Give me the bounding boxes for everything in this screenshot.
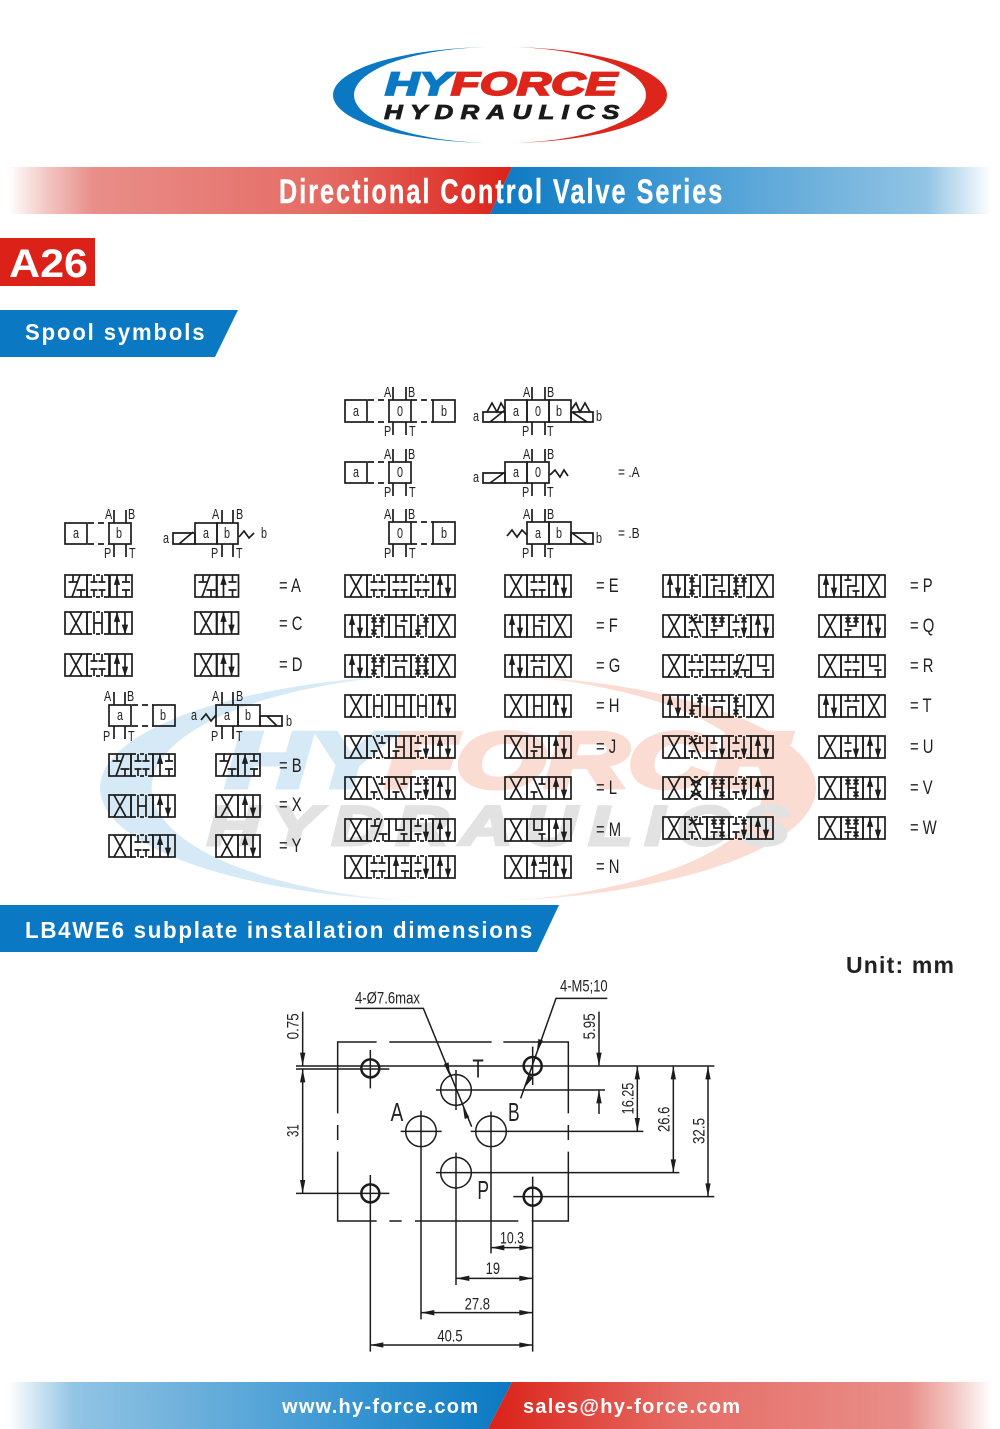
symbol: two position plain, left: a: [73, 524, 80, 541]
symbol: double solenoid three position: A: [523, 383, 530, 400]
leader 4-Ø7.6max: [355, 988, 472, 1127]
symbol: single solenoid with spring, equals .A: = .A: [618, 464, 641, 480]
unit note: Unit: mm: [846, 952, 954, 978]
symbol: two position plain, lower left: b: [160, 706, 166, 723]
symbol: two position spring and solenoid, lower left: P: [211, 727, 218, 744]
symbol: two position solenoid and spring, left: a: [163, 529, 170, 546]
symbol: single solenoid with spring, equals .A: P: [522, 483, 529, 500]
spool row M: [345, 819, 621, 841]
logo swoosh: blue: [333, 47, 497, 143]
spool row J: [345, 736, 616, 758]
spool row B: = B: [279, 755, 302, 776]
spool row D: [65, 654, 302, 676]
spool row M: = M: [596, 819, 621, 840]
symbol: two position solenoid and spring, left: P: [211, 544, 218, 561]
symbol: double position with centre, plain: a: [353, 402, 360, 419]
spool row Y: = Y: [279, 835, 301, 856]
header band: [8, 167, 992, 214]
spool row E: [345, 575, 619, 597]
watermark swoosh: red: [458, 674, 816, 902]
symbol: double position with centre, plain: B: [408, 383, 415, 400]
port letters: B: [508, 1097, 520, 1127]
symbol: double solenoid three position: T: [547, 422, 554, 439]
symbol: single solenoid with spring, equals .B: P: [522, 544, 529, 561]
symbol: single solenoid with spring, equals .B: = .B: [618, 525, 640, 541]
symbol: centre and b, plain: B: [408, 505, 415, 522]
symbol: single solenoid with spring, equals .A: B: [547, 445, 554, 462]
spool row F: = F: [596, 615, 618, 636]
symbol: two position plain, lower left: B: [127, 687, 134, 704]
symbol: double solenoid three position: [473, 383, 602, 439]
symbol: double solenoid three position: 0: [535, 402, 541, 419]
vertical dimension values: 32.5: [689, 1118, 708, 1144]
dimension lines: [303, 1012, 708, 1345]
spool row W: = W: [910, 817, 937, 838]
vertical dimension values: 16.25: [618, 1083, 637, 1114]
symbol: two position spring and solenoid, lower left: b: [286, 712, 292, 729]
spool symbols chart: [65, 383, 937, 878]
spool row X: [109, 794, 302, 817]
footer band: [8, 1382, 992, 1429]
symbol: single solenoid with spring, equals .A: a: [513, 463, 520, 480]
symbol: two position spring and solenoid, lower left: T: [236, 727, 243, 744]
symbol: centre and b, plain: 0: [397, 524, 403, 541]
symbol: two position solenoid and spring, left: T: [236, 544, 243, 561]
spool row P: = P: [910, 575, 933, 596]
watermark swoosh: blue: [100, 674, 460, 902]
spool row U: = U: [910, 736, 933, 757]
spool row L: [345, 777, 617, 799]
symbol: two position plain, lower left: P: [103, 727, 110, 744]
symbol: single solenoid with spring, equals .B: T: [547, 544, 554, 561]
symbol: centre and b, plain: T: [409, 544, 416, 561]
symbol: two position plain, left: A: [105, 505, 112, 522]
spool row D: = D: [279, 654, 302, 675]
symbol: a and centre, plain: a: [353, 463, 360, 480]
spool row E: = E: [596, 575, 619, 596]
symbol: single solenoid with spring, equals .A: [473, 445, 641, 500]
symbol: single solenoid with spring, equals .B: A: [523, 505, 530, 522]
symbol: double position with centre, plain: T: [409, 422, 416, 439]
symbol: two position plain, lower left: a: [117, 706, 124, 723]
symbol: centre and b, plain: [384, 505, 455, 561]
section banner: spool symbols: Spool symbols: [25, 320, 205, 345]
symbol: a and centre, plain: 0: [397, 463, 403, 480]
mounting holes and ports: [361, 1057, 542, 1206]
symbol: single solenoid with spring, equals .A: A: [523, 445, 530, 462]
horizontal dimension values: 40.5: [437, 1327, 463, 1346]
symbol: two position plain, left: B: [128, 505, 135, 522]
symbol: double solenoid three position: a: [513, 402, 520, 419]
footer email: sales@hy-force.com: [523, 1396, 740, 1418]
symbol: centre and b, plain: A: [384, 505, 391, 522]
symbol: two position spring and solenoid, lower left: A: [212, 687, 219, 704]
logo: [333, 47, 667, 143]
symbol: two position solenoid and spring, left: [163, 505, 267, 561]
symbol: two position solenoid and spring, left: a: [203, 524, 210, 541]
vertical dimension values: 31: [284, 1124, 303, 1137]
spool row J: = J: [596, 736, 616, 757]
symbol: double position with centre, plain: 0: [397, 402, 403, 419]
symbol: two position solenoid and spring, left: A: [212, 505, 219, 522]
symbol: single solenoid with spring, equals .B: b: [556, 524, 562, 541]
symbol: double position with centre, plain: A: [384, 383, 391, 400]
spool row F: [345, 615, 618, 637]
leader 4-Ø7.6max: 4-Ø7.6max: [355, 988, 421, 1007]
port letters: T: [472, 1053, 484, 1083]
symbol: two position spring and solenoid, lower left: a: [224, 706, 231, 723]
horizontal dimension values: 10.3: [500, 1229, 524, 1248]
symbol: two position solenoid and spring, left: B: [236, 505, 243, 522]
watermark word HYDRAULICS: HYDRAULICS: [207, 794, 789, 857]
symbol: single solenoid with spring, equals .B: [507, 505, 640, 561]
spool row Y: [109, 835, 301, 857]
symbol: a and centre, plain: T: [409, 483, 416, 500]
symbol: double solenoid three position: P: [522, 422, 529, 439]
symbol: double position with centre, plain: [345, 383, 455, 439]
section banner: subplate dimensions: [0, 905, 559, 952]
horizontal dimension values: [437, 1229, 524, 1346]
symbol: two position plain, lower left: T: [128, 727, 135, 744]
symbol: single solenoid with spring, equals .B: a: [535, 524, 542, 541]
symbol: a and centre, plain: P: [384, 483, 391, 500]
plate outline: [338, 1042, 568, 1221]
symbol: a and centre, plain: A: [384, 445, 391, 462]
symbol: two position solenoid and spring, left: b: [224, 524, 230, 541]
spool row V: = V: [910, 777, 933, 798]
dimension arrowheads: [300, 1053, 711, 1348]
spool row B: [109, 754, 302, 776]
symbol: two position spring and solenoid, lower left: b: [245, 706, 251, 723]
symbol: single solenoid with spring, equals .A: 0: [535, 463, 541, 480]
horizontal dimension values: 27.8: [465, 1294, 490, 1313]
watermark word HYFORCE: HY FORCE: [226, 716, 791, 804]
spool row N: [345, 856, 619, 878]
spool row V: [663, 777, 933, 799]
symbol: double solenoid three position: b: [556, 402, 562, 419]
section banner: spool symbols: [0, 310, 238, 357]
spool row G: [345, 655, 620, 677]
symbol: two position spring and solenoid, lower left: B: [236, 687, 243, 704]
spool row C: = C: [279, 613, 302, 634]
vertical dimension values: [284, 1013, 708, 1144]
symbol: a and centre, plain: [345, 445, 416, 500]
symbol: double position with centre, plain: P: [384, 422, 391, 439]
section banner: subplate dimensions: LB4WE6 subplate installation dimensions: [25, 917, 532, 943]
symbol: two position plain, left: T: [129, 544, 136, 561]
header title: Directional Control Valve Series: [279, 173, 722, 211]
symbol: two position solenoid and spring, left: b: [261, 524, 267, 541]
symbol: double solenoid three position: a: [473, 407, 480, 424]
logo swoosh: red: [503, 47, 667, 143]
centre and extension lines: [296, 1047, 714, 1352]
spool row P: [663, 575, 933, 597]
symbol: centre and b, plain: b: [441, 524, 447, 541]
symbol: two position spring and solenoid, lower left: [191, 687, 292, 744]
symbol: single solenoid with spring, equals .B: B: [547, 505, 554, 522]
symbol: two position spring and solenoid, lower left: a: [191, 706, 198, 723]
symbol: two position plain, lower left: [103, 687, 175, 744]
vertical dimension values: 26.6: [654, 1107, 673, 1132]
logo word HYDRAULICS: HYDRAULICS: [384, 101, 620, 123]
symbol: double solenoid three position: b: [596, 407, 602, 424]
port letters: [391, 1053, 520, 1205]
symbol: two position plain, left: [65, 505, 136, 561]
spool row W: [663, 817, 937, 839]
model badge A26: A26: [9, 242, 88, 286]
subplate dimension drawing: [284, 977, 714, 1352]
symbol: centre and b, plain: P: [384, 544, 391, 561]
spool row X: = X: [279, 794, 302, 815]
symbol: single solenoid with spring, equals .A: T: [547, 483, 554, 500]
symbol: single solenoid with spring, equals .B: b: [596, 529, 602, 546]
symbol: two position plain, left: P: [104, 544, 111, 561]
spool row A: = A: [279, 575, 301, 596]
spool row Q: = Q: [910, 615, 934, 636]
symbol: double position with centre, plain: b: [441, 402, 447, 419]
logo word HYFORCE: HY FORCE: [385, 66, 619, 102]
horizontal dimension values: 19: [486, 1259, 500, 1278]
spool row H: = H: [596, 695, 619, 716]
spool row A: [65, 575, 301, 597]
spool row T: [663, 695, 932, 717]
spool row N: = N: [596, 856, 619, 877]
leader 4-M5;10: 4-M5;10: [560, 977, 608, 996]
port letters: P: [477, 1175, 489, 1205]
spool row G: = G: [596, 655, 620, 676]
spool row L: = L: [596, 777, 617, 798]
spool row Q: [663, 615, 934, 637]
watermark logo: [100, 674, 816, 902]
spool row C: [65, 612, 302, 634]
vertical dimension values: 5.95: [580, 1013, 599, 1039]
spool row R: [663, 655, 933, 677]
symbol: a and centre, plain: B: [408, 445, 415, 462]
spool row R: = R: [910, 655, 933, 676]
vertical dimension values: 0.75: [284, 1013, 303, 1039]
spool row T: = T: [910, 695, 932, 716]
symbol: two position plain, left: b: [116, 524, 122, 541]
spool row H: [345, 695, 619, 717]
symbol: two position plain, lower left: A: [104, 687, 111, 704]
spool row U: [663, 736, 933, 758]
symbol: double solenoid three position: B: [547, 383, 554, 400]
footer website: www.hy-force.com: [281, 1396, 478, 1418]
port letters: A: [391, 1097, 404, 1127]
leader 4-M5;10: [521, 977, 608, 1098]
symbol: single solenoid with spring, equals .A: a: [473, 468, 480, 485]
